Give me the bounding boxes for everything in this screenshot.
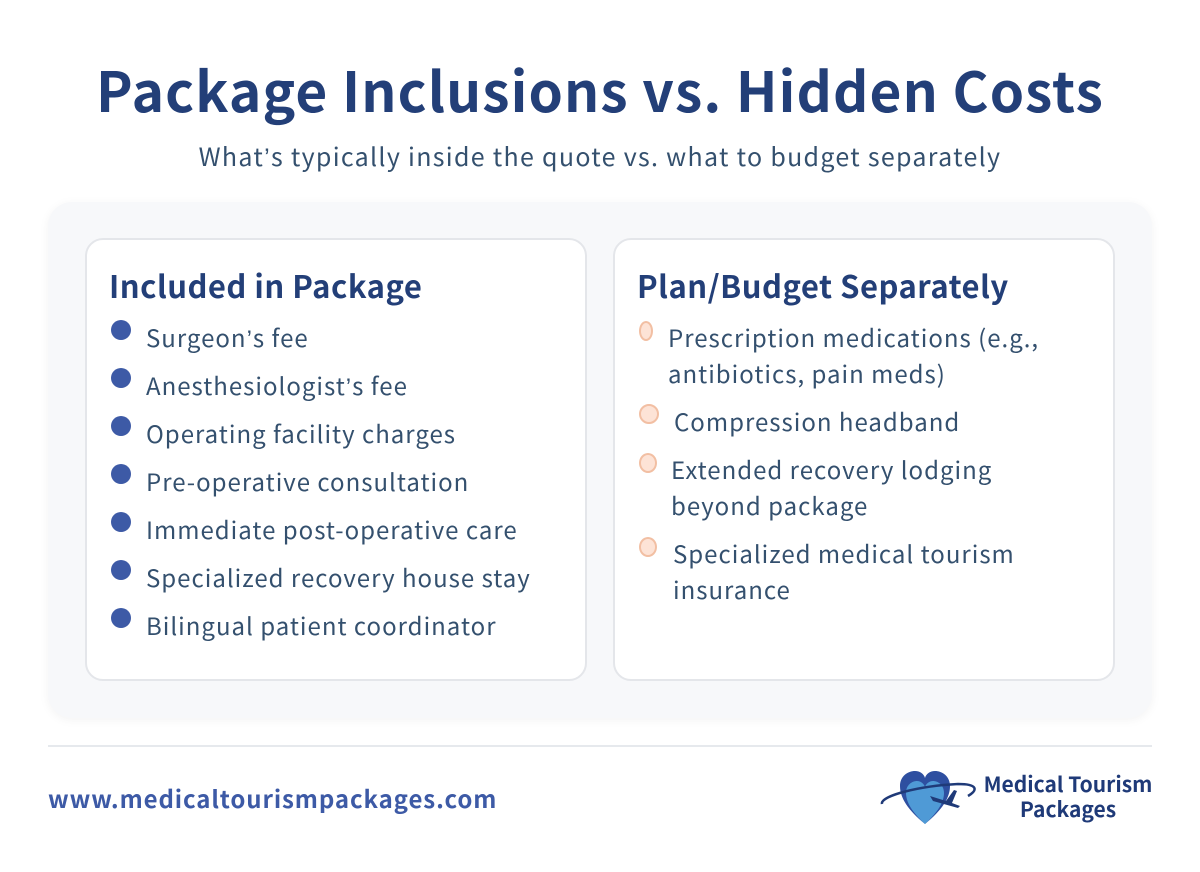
icon: heart with plane	[880, 771, 976, 824]
panel: included: Specialized recovery house stay	[146, 559, 531, 594]
panel: included: Surgeon’s fee	[146, 319, 309, 354]
heading: budget: Plan/Budget Separately	[637, 262, 1009, 307]
panel: budget separately: insurance	[673, 571, 791, 606]
background card	[48, 202, 1152, 718]
panel: budget separately: Prescription medications (e.g.,	[668, 319, 1039, 354]
panel: included: Operating facility charges	[146, 415, 456, 450]
footer url: www.medicaltourismpackages.com	[48, 780, 497, 815]
divider	[48, 745, 1152, 747]
panel: budget separately: antibiotics, pain meds)	[668, 355, 946, 390]
panel: budget separately: beyond package	[671, 487, 868, 522]
logo text	[984, 769, 1152, 824]
heading: included: Included in Package	[109, 262, 422, 307]
panel: budget separately: Extended recovery lodging	[671, 451, 992, 486]
panel: included: Immediate post-operative care	[146, 511, 518, 546]
panel: included	[85, 238, 587, 681]
panel: budget separately	[613, 238, 1115, 681]
panel: budget separately: Specialized medical tourism	[673, 535, 1015, 570]
logo text: Packages	[1020, 794, 1116, 824]
logo text: Medical Tourism	[984, 769, 1152, 799]
panel: included: Anesthesiologist’s fee	[146, 367, 408, 402]
subtitle: What’s typically inside the quote vs. what to budget separately	[199, 138, 1001, 174]
panel: included: Pre-operative consultation	[146, 463, 469, 498]
logo	[880, 769, 1152, 824]
panel: included: Bilingual patient coordinator	[146, 607, 497, 642]
title: Package Inclusions vs. Hidden Costs	[96, 48, 1104, 128]
panel: budget separately: Compression headband	[674, 403, 960, 438]
